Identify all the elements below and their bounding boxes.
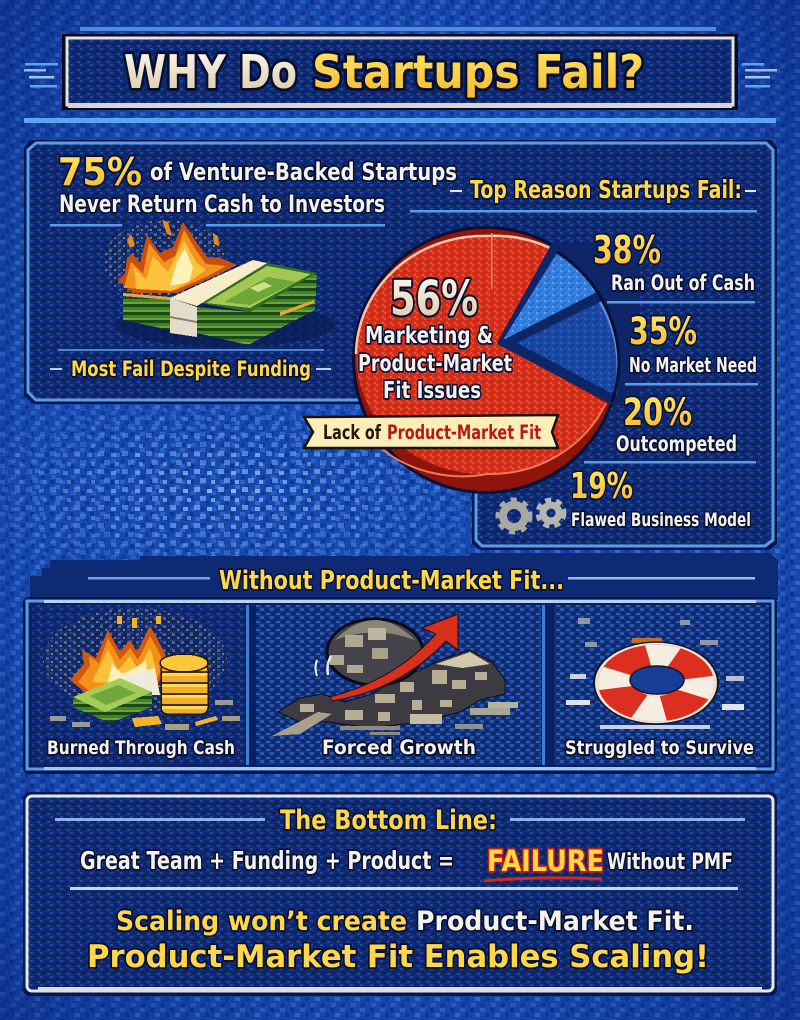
headline: 75 percent: 75% [58, 150, 142, 194]
caption: most fail despite funding: Most Fail Despite Funding [71, 357, 311, 381]
heading: the bottom line [55, 805, 745, 836]
title text: Startups Fail? [312, 45, 644, 99]
pie label: 56 percent: Marketing & [365, 323, 493, 349]
stat: 19 percent: 19% [570, 466, 633, 507]
equation line: Great Team + Funding + Product = [80, 846, 454, 875]
card: struggled to survive [554, 605, 769, 765]
pie label: 56 percent: 56% [390, 271, 478, 327]
icon: life ring in water [566, 618, 744, 729]
band: without product-market fit [30, 553, 778, 600]
stat: 35 percent [629, 310, 757, 377]
icon: burning cash and coins [43, 608, 240, 730]
heading: the bottom line: The Bottom Line: [280, 805, 497, 836]
headline: 75 percent [58, 150, 457, 218]
pie label: 56 percent [358, 271, 512, 404]
stat: 38 percent: Ran Out of Cash [611, 271, 755, 295]
panel: statistics [24, 140, 777, 550]
band: without product-market fit: Without Product-Market Fit... [219, 566, 564, 596]
stat: 20 percent: Outcompeted [616, 432, 737, 456]
panel: the bottom line [23, 792, 777, 996]
card: burned through cash: Burned Through Cash [47, 737, 235, 759]
stat: 38 percent [593, 228, 755, 295]
stat: 20 percent [616, 391, 737, 456]
card: burned through cash [32, 605, 249, 765]
ribbon: lack of product-market fit: Lack of [323, 421, 381, 444]
stat: 35 percent: 35% [629, 310, 697, 353]
card: forced growth [256, 605, 545, 765]
equation line: FAILURE [487, 844, 604, 878]
conclusion text: Product-Market Fit. [416, 906, 694, 937]
headline: 75 percent: of Venture-Backed Startups [150, 158, 457, 186]
title text: WHY Do [124, 45, 297, 99]
pie chart [352, 226, 640, 494]
icon: gears [498, 500, 564, 532]
ribbon: lack of product-market fit [304, 415, 558, 448]
pie label: 56 percent: Product-Market [358, 351, 512, 377]
panel: without PMF outcomes [23, 597, 777, 774]
headline: 75 percent: Never Return Cash to Investors [59, 190, 385, 218]
conclusion text: Product-Market Fit Enables Scaling! [87, 939, 709, 975]
card: struggled to survive: Struggled to Survive [565, 737, 754, 759]
equation line [80, 844, 733, 881]
card: forced growth: Forced Growth [322, 736, 476, 759]
conclusion text: Scaling won’t create [116, 906, 407, 937]
icon: boulder and red arrow [272, 614, 518, 736]
title text [124, 45, 644, 99]
stat: 38 percent: 38% [593, 228, 661, 272]
stat: 19 percent [570, 466, 751, 531]
icon: burning cash stack [103, 220, 335, 347]
title banner [24, 27, 777, 110]
conclusion text [87, 906, 709, 975]
pie label: 56 percent: Fit Issues [383, 378, 481, 404]
stat: 20 percent: 20% [623, 391, 692, 434]
ribbon: lack of product-market fit: Product-Market Fit [387, 421, 541, 444]
equation line: Without PMF [607, 850, 733, 875]
